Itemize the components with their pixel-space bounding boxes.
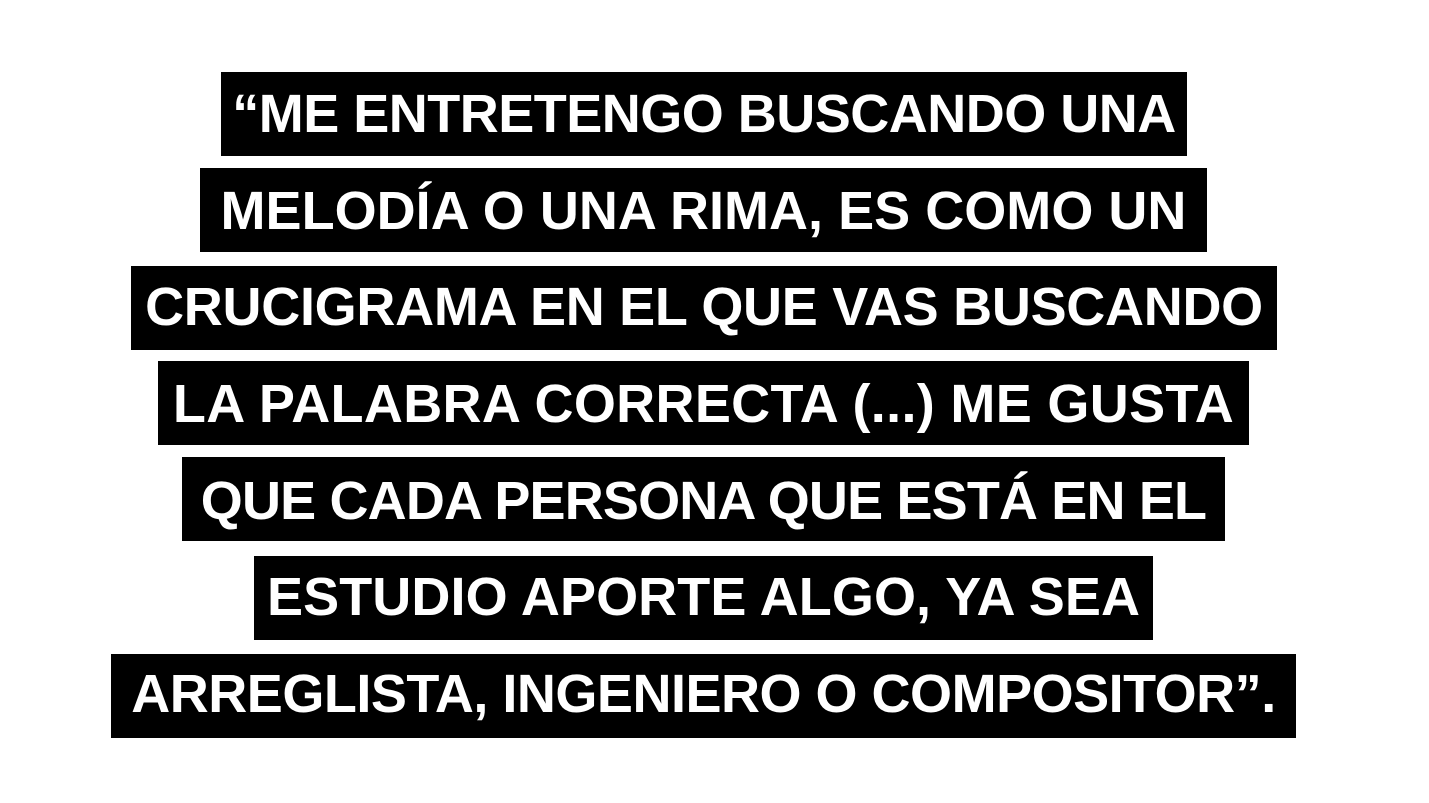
- quote line 5: [182, 457, 1225, 541]
- quote line 6: [254, 556, 1153, 640]
- quote line 4: [158, 361, 1249, 445]
- quote line 5: QUE CADA PERSONA QUE ESTÁ EN EL: [201, 471, 1206, 531]
- quote line 2: [200, 168, 1207, 252]
- quote line 7: [111, 654, 1296, 738]
- quote line 1: [221, 72, 1187, 156]
- quote line 1: “ME ENTRETENGO BUSCANDO UNA: [232, 84, 1176, 144]
- quote: full text block: [111, 72, 1296, 738]
- quote line 7: ARREGLISTA, INGENIERO O COMPOSITOR”.: [131, 664, 1276, 724]
- quote line 3: CRUCIGRAMA EN EL QUE VAS BUSCANDO: [145, 277, 1263, 337]
- quote line 3: [131, 266, 1277, 350]
- quote line 2: MELODÍA O UNA RIMA, ES COMO UN: [221, 181, 1186, 241]
- quote line 6: ESTUDIO APORTE ALGO, YA SEA: [267, 567, 1140, 627]
- quote line 4: LA PALABRA CORRECTA (...) ME GUSTA: [173, 374, 1234, 434]
